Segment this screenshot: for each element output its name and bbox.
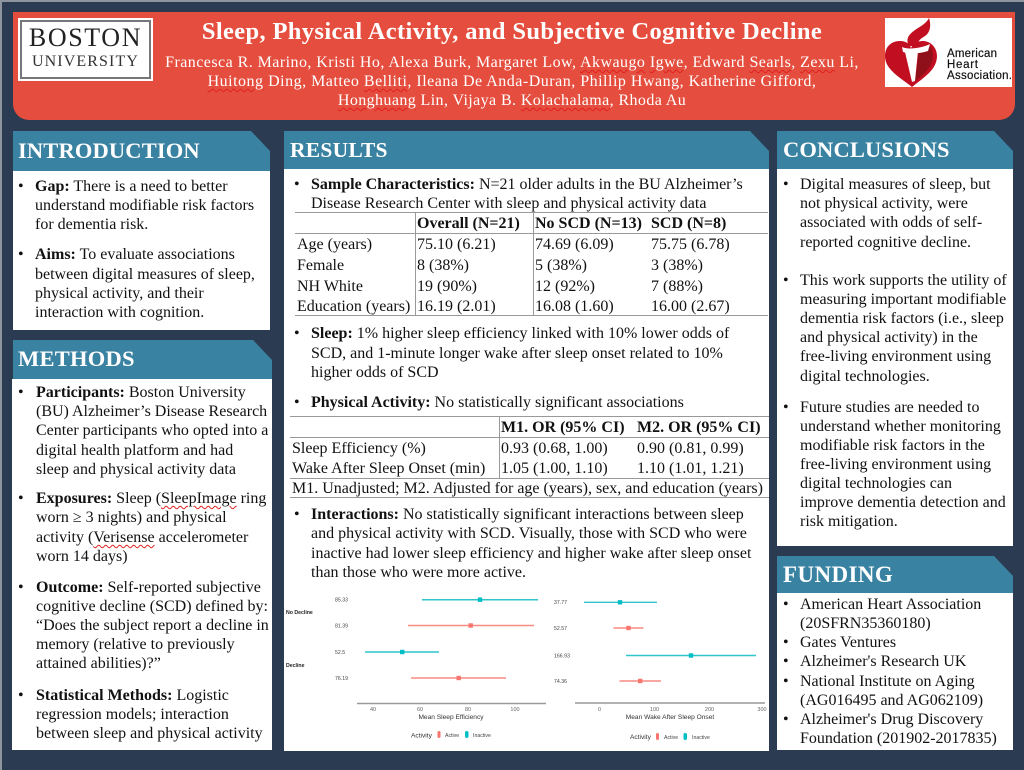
text: methods bullets: • bbox=[18, 687, 24, 704]
text: funding list: • bbox=[783, 634, 789, 651]
text: methods bullets: Exposures: Sleep (SleepImage ring bbox=[36, 490, 266, 507]
intervals bbox=[584, 600, 756, 683]
text: funding list: • bbox=[783, 596, 789, 613]
heading: results: RESULTS bbox=[290, 138, 388, 162]
title: Sleep, Physical Activity, and Subjective Cognitive Decline bbox=[202, 18, 822, 45]
value labels bbox=[554, 600, 570, 685]
text: methods bullets: Outcome: Self-reported subjective bbox=[36, 579, 261, 596]
text: introduction bullets: • bbox=[18, 246, 24, 263]
text: conclusions bullets: digital technologies can bbox=[800, 475, 952, 492]
text: sleep findings bbox=[294, 325, 730, 381]
text: methods bullets bbox=[12, 379, 272, 750]
text: interactions bbox=[294, 506, 752, 581]
text: methods bullets: regression models; interaction bbox=[36, 706, 229, 723]
legend: Active bbox=[664, 735, 678, 741]
logo: Boston University: BOSTON bbox=[29, 23, 142, 52]
heading: introduction: INTRODUCTION bbox=[18, 138, 200, 163]
text: conclusions bullets: associated with odds of self- bbox=[800, 214, 982, 231]
table: sample characteristics: 5 (38%) bbox=[535, 257, 587, 274]
table: sample characteristics: 75.10 (6.21) bbox=[417, 236, 496, 253]
heading: funding bbox=[777, 556, 1013, 593]
group labels bbox=[286, 610, 313, 669]
legend: Active bbox=[445, 733, 459, 739]
text: methods bullets: (BU) Alzheimer’s Disease Research bbox=[36, 403, 267, 420]
heading: conclusions: CONCLUSIONS bbox=[783, 137, 950, 162]
legend: Activity bbox=[630, 734, 652, 741]
table: sample characteristics: No SCD (N=13) bbox=[535, 215, 642, 232]
table: sample characteristics: 16.19 (2.01) bbox=[417, 298, 496, 315]
table: odds ratios: 1.05 (1.00, 1.10) bbox=[501, 460, 608, 477]
table: odds ratios: 0.90 (0.81, 0.99) bbox=[637, 440, 744, 457]
authors: Huitong Ding, Matteo Belliti, Ileana De Anda-Duran, Phillip Hwang, Katherine Gifford, bbox=[208, 73, 816, 90]
text: funding list: • bbox=[783, 673, 789, 690]
text: methods bullets: • bbox=[18, 579, 24, 596]
text: methods bullets: worn 14 days) bbox=[36, 548, 128, 565]
text: methods bullets: memory (relative to previously bbox=[36, 636, 235, 653]
table: sample characteristics: Age (years) bbox=[297, 236, 372, 253]
chart: mean sleep efficiency: 80 bbox=[465, 707, 471, 713]
text: conclusions bullets: • bbox=[783, 176, 789, 193]
logo: American Heart Association: Association. bbox=[947, 70, 1012, 82]
table: odds ratios: 1.10 (1.01, 1.21) bbox=[637, 460, 744, 477]
table: odds ratios: M2. OR (95% CI) bbox=[637, 419, 761, 436]
text: sample characteristics: Disease Research Center with sleep and physical activity data bbox=[311, 195, 706, 212]
text: conclusions bullets: This work supports the utility of bbox=[800, 272, 1007, 289]
x axis bbox=[357, 702, 546, 704]
text: introduction bullets: • bbox=[18, 178, 24, 195]
value labels: 85.33 bbox=[335, 598, 348, 604]
text: funding list: Foundation (201902-2017835) bbox=[800, 730, 997, 747]
chart: mean sleep efficiency: 40 bbox=[370, 707, 376, 713]
table: sample characteristics: 19 (90%) bbox=[417, 278, 477, 295]
heading: funding: FUNDING bbox=[783, 562, 893, 587]
text: sleep findings: higher odds of SCD bbox=[311, 364, 439, 381]
authors bbox=[165, 54, 859, 112]
text: conclusions bullets: digital technologies. bbox=[800, 368, 930, 385]
text: introduction bullets: for dementia risk. bbox=[35, 216, 148, 233]
text: funding list: (20SFRN35360180) bbox=[800, 615, 931, 632]
text: introduction bullets: interaction with cognition. bbox=[35, 304, 204, 321]
text: introduction bullets: Aims: To evaluate associations bbox=[35, 246, 235, 263]
chart: mean wake after sleep onset: 300 bbox=[757, 707, 767, 713]
table: sample characteristics: 12 (92%) bbox=[535, 278, 595, 295]
text: conclusions bullets: Digital measures of sleep, but bbox=[800, 176, 991, 193]
panel: conclusions bbox=[777, 131, 1013, 546]
table: sample characteristics: Overall (N=21) bbox=[417, 215, 520, 232]
table: odds ratios: Sleep Efficiency (%) bbox=[292, 440, 426, 457]
text: conclusions bullets: • bbox=[783, 272, 789, 289]
text: funding list: Gates Ventures bbox=[800, 634, 896, 651]
text: funding list: American Heart Association bbox=[800, 596, 981, 613]
text: funding list: National Institute on Aging bbox=[800, 673, 975, 690]
text: introduction bullets bbox=[13, 171, 270, 330]
text: conclusions bullets: reported cognitive decline. bbox=[800, 234, 971, 251]
table: odds ratios: M1. Unadjusted; M2. Adjusted for age (years), sex, and education (years) bbox=[292, 480, 763, 497]
legend: Inactive bbox=[692, 735, 710, 741]
value labels: 52.5 bbox=[335, 650, 345, 656]
text: methods bullets: activity (Verisense accelerometer bbox=[36, 529, 248, 546]
text: funding list: • bbox=[783, 653, 789, 670]
chart: mean wake after sleep onset: Mean Wake After Sleep Onset bbox=[626, 714, 714, 721]
text: introduction bullets: understand modifiable risk factors bbox=[35, 197, 254, 214]
panel: methods bbox=[12, 340, 272, 750]
text: conclusions bullets: modifiable risk factors in the bbox=[800, 437, 985, 454]
legend bbox=[630, 733, 710, 741]
text: interactions: inactive had lower sleep efficiency and higher wake after sleep onset bbox=[311, 545, 751, 562]
text: physical activity findings: Physical Activity: No statistically significant associations bbox=[311, 394, 684, 411]
chart: mean wake after sleep onset: 100 bbox=[650, 707, 659, 713]
table: sample characteristics: SCD (N=8) bbox=[651, 215, 726, 232]
logo: American Heart Association: Heart bbox=[947, 59, 979, 71]
legend: Inactive bbox=[473, 733, 491, 739]
value labels: 52.57 bbox=[554, 626, 567, 632]
table: odds ratios: 0.93 (0.68, 1.00) bbox=[501, 440, 608, 457]
logo: American Heart Association: American bbox=[947, 48, 997, 60]
text: methods bullets: “Does the subject report a decline in bbox=[36, 617, 269, 634]
text: introduction bullets: physical activity, and their bbox=[35, 285, 204, 302]
table: sample characteristics: 74.69 (6.09) bbox=[535, 236, 614, 253]
text: interactions: and physical activity with SCD. Visually, those with SCD who were bbox=[311, 525, 747, 542]
text: sample characteristics: • bbox=[294, 176, 300, 193]
text: methods bullets: cognitive decline (SCD) defined by: bbox=[36, 598, 268, 615]
text: interactions: • bbox=[294, 506, 300, 523]
table: sample characteristics: 75.75 (6.78) bbox=[651, 236, 730, 253]
chart: mean sleep efficiency bbox=[286, 598, 546, 740]
x axis bbox=[575, 702, 765, 704]
intervals bbox=[365, 598, 538, 680]
text: sample characteristics: Sample Characteristics: N=21 older adults in the BU Alzheimer’s bbox=[311, 176, 743, 193]
value labels: 76.19 bbox=[335, 676, 348, 682]
group labels: No Decline bbox=[286, 610, 313, 616]
text: methods bullets: • bbox=[18, 490, 24, 507]
logo: Boston University: UNIVERSITY bbox=[32, 53, 139, 70]
text: physical activity findings: • bbox=[294, 394, 300, 411]
text: conclusions bullets: Future studies are needed to bbox=[800, 399, 980, 416]
text: sample characteristics bbox=[294, 176, 743, 212]
text: methods bullets: Participants: Boston University bbox=[36, 384, 246, 401]
authors: Honghuang Lin, Vijaya B. Kolachalama, Rhoda Au bbox=[338, 92, 686, 109]
heading: methods: METHODS bbox=[18, 346, 135, 371]
value labels: 37.77 bbox=[554, 600, 567, 606]
table: odds ratios bbox=[290, 416, 769, 498]
heading: conclusions bbox=[777, 131, 1013, 169]
header banner bbox=[13, 12, 1015, 120]
value labels: 81.39 bbox=[335, 624, 348, 630]
table: sample characteristics bbox=[295, 212, 768, 316]
table: sample characteristics: 16.08 (1.60) bbox=[535, 298, 614, 315]
text: conclusions bullets: improve dementia detection and bbox=[800, 494, 1006, 511]
table: sample characteristics: Female bbox=[297, 257, 344, 274]
text: methods bullets: between sleep and physical activity bbox=[36, 725, 263, 742]
table: sample characteristics: 8 (38%) bbox=[417, 257, 469, 274]
text: conclusions bullets: free-living environment using bbox=[800, 456, 991, 473]
table: sample characteristics: 7 (88%) bbox=[651, 278, 703, 295]
text: methods bullets: digital health platform and had bbox=[36, 442, 233, 459]
text: funding list: Alzheimer's Research UK bbox=[800, 653, 966, 670]
text: funding list: (AG016495 and AG062109) bbox=[800, 692, 983, 709]
text: methods bullets: • bbox=[18, 384, 24, 401]
value labels: 74.36 bbox=[554, 679, 567, 685]
table: odds ratios: Wake After Sleep Onset (min) bbox=[292, 460, 485, 477]
text: funding list: • bbox=[783, 711, 789, 728]
text: interactions: Interactions: No statistically significant interactions between sleep bbox=[311, 506, 744, 523]
text: sleep findings: • bbox=[294, 325, 300, 342]
text: conclusions bullets: measuring important modifiable bbox=[800, 291, 1006, 308]
text: conclusions bullets: not physical activity, were bbox=[800, 195, 968, 212]
chart: mean sleep efficiency: 60 bbox=[417, 707, 423, 713]
chart: mean wake after sleep onset: 200 bbox=[705, 707, 714, 713]
authors: Francesca R. Marino, Kristi Ho, Alexa Burk, Margaret Low, Akwaugo Igwe, Edward Searls, Zexu Li, bbox=[165, 54, 859, 71]
text: methods bullets: attained abilities)?” bbox=[36, 655, 161, 672]
legend: Activity bbox=[411, 732, 433, 740]
logo: Boston University bbox=[18, 18, 153, 81]
text: interactions: than those who were more active. bbox=[311, 564, 526, 581]
text: funding list bbox=[777, 593, 1013, 750]
logo: American Heart Association bbox=[885, 18, 1012, 87]
chart: mean sleep efficiency: 100 bbox=[510, 707, 520, 713]
table: sample characteristics: 3 (38%) bbox=[651, 257, 703, 274]
chart: mean sleep efficiency: Mean Sleep Efficiency bbox=[418, 714, 484, 721]
table: odds ratios: M1. OR (95% CI) bbox=[501, 419, 625, 436]
text: methods bullets: Center participants who opted into a bbox=[36, 422, 268, 439]
text: conclusions bullets: understand whether monitoring bbox=[800, 418, 1001, 435]
text: conclusions bullets: risk mitigation. bbox=[800, 513, 898, 530]
text: conclusions bullets: dementia risk factors (i.e., sleep bbox=[800, 310, 1004, 327]
value labels: 166.93 bbox=[554, 654, 570, 660]
chart: mean wake after sleep onset bbox=[554, 600, 767, 741]
text: methods bullets: sleep and physical activity data bbox=[36, 461, 236, 478]
table: sample characteristics: Education (years) bbox=[297, 298, 410, 315]
panel: results bbox=[284, 131, 769, 751]
text: funding list: Alzheimer's Drug Discovery bbox=[800, 711, 983, 728]
heading: introduction bbox=[13, 131, 270, 171]
panel: funding bbox=[777, 556, 1013, 750]
text: conclusions bullets: and physical activity) in the bbox=[800, 329, 978, 346]
legend bbox=[411, 731, 491, 740]
table: sample characteristics: NH White bbox=[297, 278, 363, 295]
table: sample characteristics: 16.00 (2.67) bbox=[651, 298, 730, 315]
text: introduction bullets: Gap: There is a need to better bbox=[35, 178, 228, 195]
value labels bbox=[335, 598, 348, 682]
heading: methods bbox=[13, 340, 272, 379]
text: sleep findings: SCD, and 1-minute longer wake after sleep onset related to 10% bbox=[311, 345, 723, 362]
chart: mean wake after sleep onset: 0 bbox=[598, 707, 601, 713]
text: methods bullets: Statistical Methods: Logistic bbox=[36, 687, 229, 704]
group labels: Decline bbox=[286, 663, 305, 669]
panel: introduction bbox=[13, 131, 270, 330]
text: methods bullets: worn ≥ 3 nights) and physical bbox=[36, 509, 227, 526]
heading: results bbox=[284, 131, 769, 169]
text: conclusions bullets: free-living environment using bbox=[800, 348, 991, 365]
text: sleep findings: Sleep: 1% higher sleep efficiency linked with 10% lower odds of bbox=[311, 325, 729, 342]
text: conclusions bullets bbox=[777, 169, 1013, 546]
text: introduction bullets: between digital measures of sleep, bbox=[35, 266, 255, 283]
text: conclusions bullets: • bbox=[783, 399, 789, 416]
charts: sleep efficiency and wake after sleep onset forest plots bbox=[286, 598, 767, 741]
